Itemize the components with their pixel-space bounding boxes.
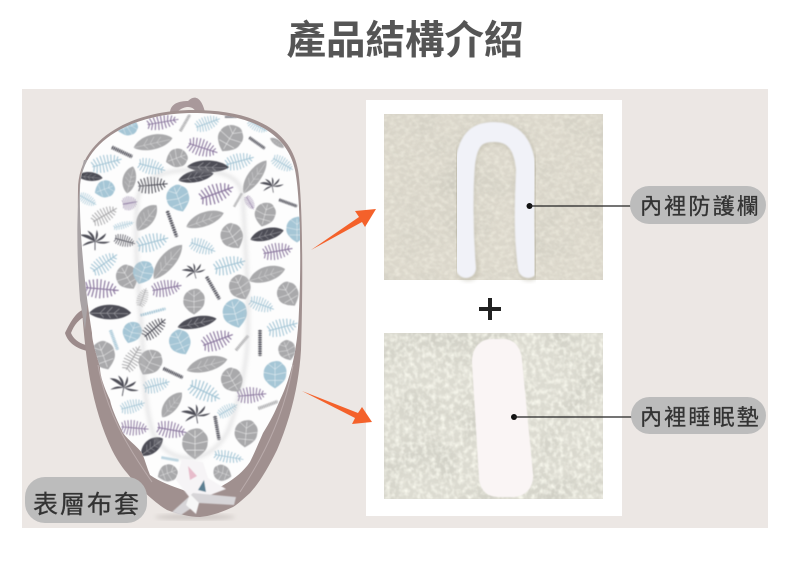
callout dot bbox=[526, 203, 532, 209]
ribbon bow bbox=[172, 459, 236, 515]
printed white cushion bbox=[80, 113, 300, 496]
arrow: to inner mat bbox=[302, 391, 372, 424]
carpet texture bbox=[384, 333, 603, 499]
left grey cushion edge bbox=[77, 160, 92, 330]
callout line: mat bbox=[514, 416, 632, 418]
U-shaped bolster bbox=[464, 132, 528, 268]
illustration: baby nest bbox=[65, 98, 308, 520]
bolster shadow bbox=[463, 133, 529, 270]
label: 表層布套 bbox=[25, 477, 147, 523]
outer taupe cover bbox=[78, 110, 302, 517]
carpet blotches bbox=[384, 333, 603, 499]
side handle bbox=[65, 309, 87, 351]
title: 產品結構介紹 bbox=[286, 19, 524, 63]
carpet blotches bbox=[384, 114, 603, 280]
white panel bbox=[366, 100, 622, 516]
arrow: to inner bolster bbox=[311, 209, 376, 250]
label: 內裡防護欄: 內裡防護欄 bbox=[640, 194, 761, 219]
label: 內裡防護欄 bbox=[630, 186, 766, 224]
callout line: bolster bbox=[530, 205, 631, 207]
cushion inner shading bbox=[136, 170, 248, 458]
top handle bbox=[170, 98, 205, 112]
label: 內裡睡眠墊 bbox=[631, 397, 766, 434]
callout dot bbox=[511, 414, 517, 420]
label: 內裡睡眠墊: 內裡睡眠墊 bbox=[640, 405, 761, 430]
drop shadow bbox=[155, 514, 235, 520]
carpet texture bbox=[384, 114, 603, 280]
mat bbox=[472, 339, 533, 497]
photo: inner mat bbox=[384, 333, 603, 499]
background panel bbox=[22, 89, 768, 528]
seam highlight bbox=[98, 365, 293, 492]
leaf print pattern bbox=[77, 112, 308, 485]
plus sign bbox=[479, 298, 501, 320]
photo: inner bolster bbox=[384, 114, 603, 280]
label: 表層布套: 表層布套 bbox=[33, 491, 141, 519]
